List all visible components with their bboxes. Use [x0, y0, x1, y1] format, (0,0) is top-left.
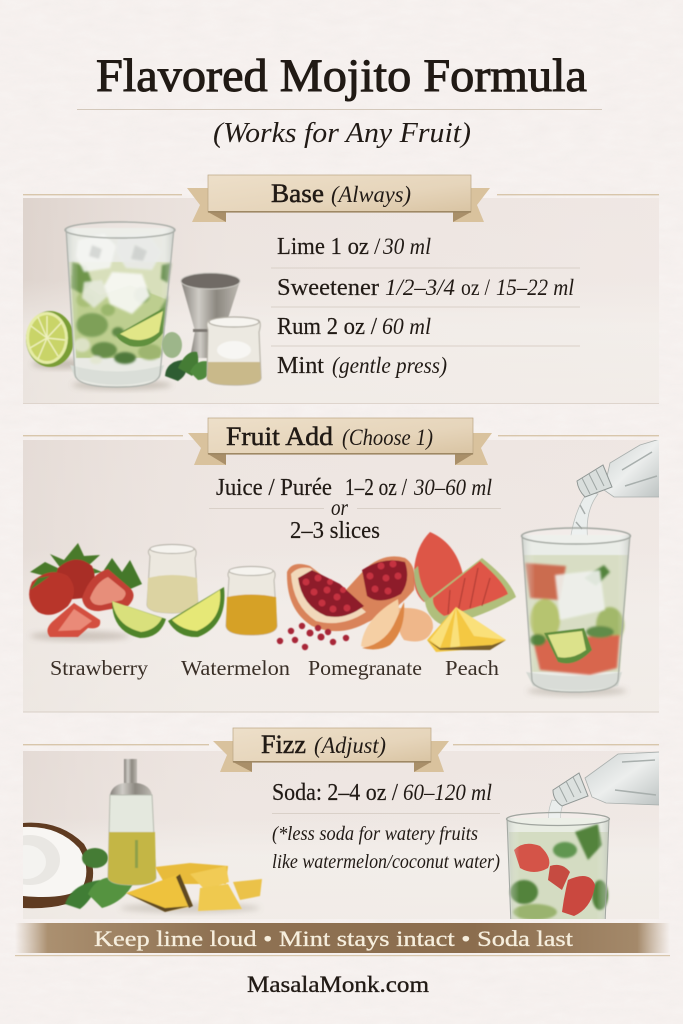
fruit labels: Watermelon [181, 656, 291, 680]
base ingredient list: 60 ml [382, 314, 431, 339]
base ingredient list [271, 234, 580, 379]
icon: strawberry soda glass [506, 812, 610, 925]
footer site name: MasalaMonk.com [247, 972, 429, 997]
base ingredient list: (gentle press) [332, 353, 447, 378]
icon: fruit mojito glass [522, 528, 630, 696]
panel: fizz [0, 728, 660, 925]
fruit amount text: 1–2 oz / [345, 475, 407, 501]
base ribbon heading: (Always) [331, 182, 411, 207]
fruit amount text: or [331, 495, 349, 520]
fruit panel background [23, 440, 659, 712]
soda note [272, 823, 500, 873]
tagline band: Keep lime loud • Mint stays intact • Soda last [94, 926, 573, 951]
panel: base [23, 175, 659, 404]
fruit ribbon heading [188, 418, 492, 465]
icon: watermelon slices [414, 532, 516, 626]
subtitle: (Works for Any Fruit) [213, 117, 471, 149]
lime wedge in glass [116, 307, 165, 347]
icon: peach slices [361, 599, 433, 649]
icon: small glass jar [207, 317, 261, 385]
fruit labels: Peach [445, 656, 500, 680]
base ingredient list: Lime 1 oz [277, 234, 369, 260]
icon: pineapple chunk [427, 607, 506, 652]
icon: pouring soda bottle [570, 439, 660, 542]
base ribbon heading: Base [271, 179, 324, 208]
fruit amount text: 30–60 ml [413, 475, 492, 500]
fruit amount text: Juice / Purée [216, 475, 332, 501]
icon: halved lime [26, 311, 88, 369]
fizz panel background [23, 751, 659, 919]
icon: mint sprig [162, 332, 212, 381]
fruit labels: Pomegranate [308, 656, 422, 680]
base ingredient list: 30 ml [382, 234, 431, 259]
title: Flavored Mojito Formula [96, 50, 587, 102]
fizz ribbon heading: Fizz [261, 730, 306, 759]
icon: metal jigger [181, 273, 240, 358]
fruit ribbon heading: (Choose 1) [342, 425, 433, 450]
base ingredient list: Mint [277, 353, 324, 379]
icon: juice jar [147, 544, 198, 613]
base ingredient list: 15–22 ml [496, 275, 574, 300]
base ingredient list: / [374, 234, 381, 259]
icon: honey jar [226, 566, 277, 635]
base ingredient list: oz / [461, 275, 491, 300]
base ribbon heading [187, 175, 490, 222]
soda amount text: Soda: 2–4 oz / [272, 780, 398, 806]
icon: soda bottle [548, 752, 659, 818]
icon: mint leaves [65, 848, 134, 909]
soda note: (*less soda for watery fruits [272, 823, 478, 845]
icon: pineapple chunks [120, 863, 262, 913]
fruit labels [50, 656, 500, 680]
fruit amount text: 2–3 slices [290, 518, 380, 544]
soda amount text: 60–120 ml [403, 780, 492, 805]
fizz ribbon heading [213, 728, 449, 772]
soda note: like watermelon/coconut water) [272, 851, 500, 873]
base ingredient list: Rum 2 oz / [277, 314, 377, 340]
icon: pomegranate [277, 556, 415, 650]
soda amount text [272, 780, 500, 814]
base ingredient list: 1/2–3/4 [385, 275, 455, 300]
base ingredient list: Sweetener [277, 275, 379, 301]
fizz ribbon heading: (Adjust) [314, 733, 386, 758]
base panel background [23, 198, 659, 403]
icon: lime wedges [112, 587, 224, 638]
icon: mojito glass with ice and mint [65, 222, 175, 390]
fruit ribbon heading: Fruit Add [226, 422, 333, 451]
icon: strawberries [29, 543, 142, 641]
icon: oil dispenser bottle [108, 759, 156, 885]
fruit amount text [209, 475, 501, 544]
tagline band [15, 923, 670, 956]
icon: coconut half [23, 822, 94, 908]
fruit labels: Strawberry [50, 656, 149, 680]
panel: fruit add [23, 418, 660, 712]
